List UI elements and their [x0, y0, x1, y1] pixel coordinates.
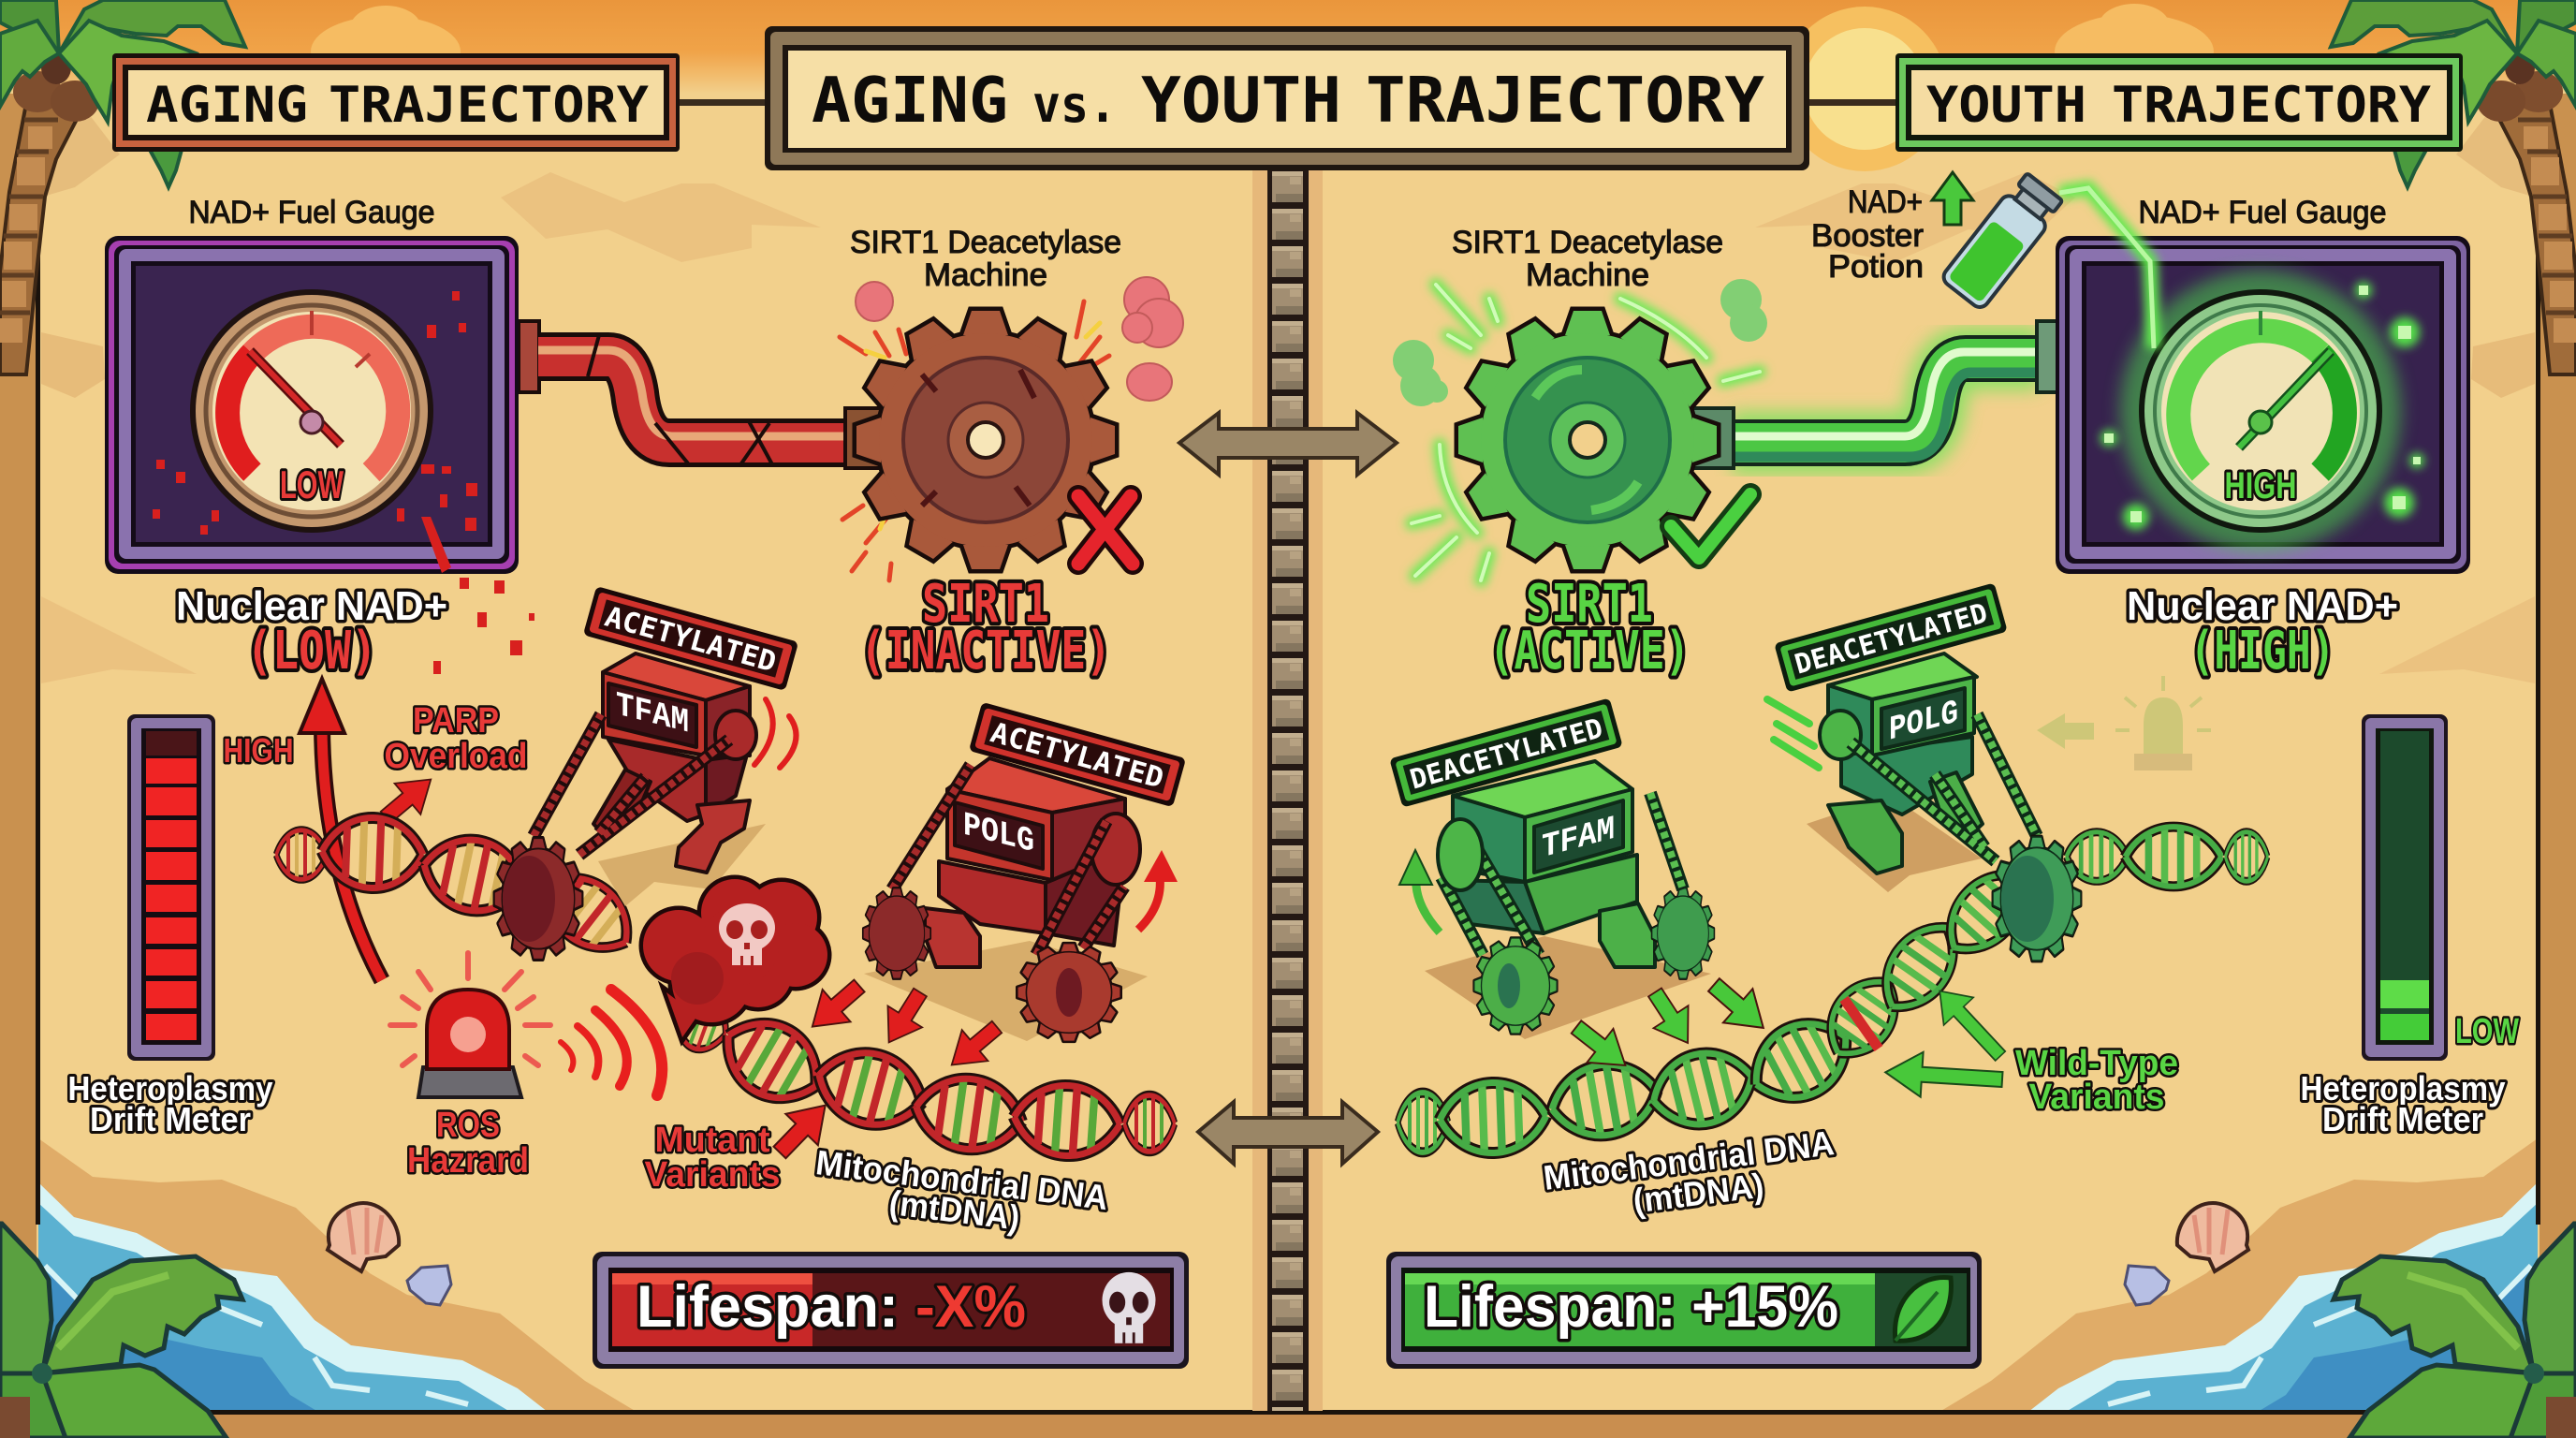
robot: POLG acetylated — [863, 758, 1148, 1041]
gauge panel: high NAD+ — [2056, 236, 2470, 574]
label: SIRT1 deacetylase machine: SIRT1 Deacetylase — [850, 225, 1121, 260]
shoreline left — [38, 1138, 637, 1412]
gear: SIRT1 inactive — [845, 311, 1115, 569]
panel: aging side — [67, 195, 1189, 1369]
palm bottom right — [2334, 1224, 2576, 1438]
dunes left — [41, 108, 821, 683]
arrow: ROS to NAD+ depletion — [300, 679, 382, 980]
gauge dial: low: LOW — [280, 462, 344, 506]
banner: aging trajectory — [112, 53, 680, 152]
label: NAD+ booster potion: NAD+ — [1848, 184, 1923, 220]
label: SIRT1 deacetylase machine — [1452, 225, 1723, 293]
potion stream — [2059, 188, 2154, 348]
sparks — [840, 301, 1109, 580]
lifespan bar: aging: Lifespan: — [637, 1274, 899, 1340]
arrow: PARP — [373, 764, 444, 833]
label: heteroplasmy drift meter — [2301, 1069, 2505, 1138]
title banner: YOUTH — [1141, 64, 1341, 137]
label: mitochondrial DNA: (mtDNA) — [1631, 1167, 1765, 1220]
title banner: vs. — [1032, 75, 1117, 134]
label: NAD+ fuel gauge: NAD+ Fuel Gauge — [189, 195, 434, 230]
tag: acetylated POLG: ACETYLATED — [987, 716, 1167, 796]
label: heteroplasmy drift meter: Heteroplasmy — [67, 1069, 273, 1108]
label: Nuclear NAD+ low: (LOW) — [246, 621, 377, 682]
label: SIRT1 active: SIRT1 — [1526, 574, 1653, 635]
label: heteroplasmy drift meter — [67, 1069, 273, 1138]
connector lines — [680, 99, 1895, 106]
label: wild-type variants: Variants — [2029, 1078, 2164, 1117]
gauge panel: low NAD+ — [105, 236, 519, 574]
label: wild-type variants: Wild-Type — [2015, 1044, 2178, 1083]
label: ROS hazard: ROS — [436, 1106, 500, 1145]
arrow: NAD+ up — [1932, 172, 1973, 225]
label: SIRT1 deacetylase machine: Machine — [1526, 257, 1649, 293]
banner: youth trajectory: TRAJECTORY — [2112, 77, 2431, 134]
meter: heteroplasmy low — [2362, 714, 2448, 1061]
banner: aging trajectory: TRAJECTORY — [329, 77, 649, 134]
DNA wild-type strand — [1398, 827, 2268, 1154]
DNA mitochondrial mutant strand — [670, 993, 1175, 1159]
title banner — [765, 26, 1809, 170]
tag: acetylated POLG — [969, 702, 1186, 807]
mutant band — [1844, 999, 1879, 1049]
lifespan bar: youth: Lifespan: +15% — [1424, 1274, 1838, 1340]
label: mutant variants: Variants — [644, 1155, 781, 1195]
tag: deacetylated POLG — [1774, 582, 2008, 693]
label: PARP overload: PARP — [413, 701, 499, 741]
tag: acetylated TFAM — [583, 586, 798, 691]
gauge dial: low — [190, 289, 433, 533]
label: Nuclear NAD+ high: (HIGH) — [2190, 621, 2334, 682]
label: SIRT1 deacetylase machine — [850, 225, 1121, 293]
banner: aging trajectory: AGING — [146, 77, 308, 134]
DNA upper strand — [276, 816, 644, 966]
icon: green check — [1671, 494, 1750, 558]
robot: TFAM deacetylated — [1425, 761, 1714, 1039]
label: SIRT1 inactive: (INACTIVE) — [860, 621, 1111, 682]
label: HIGH: HIGH — [223, 731, 294, 770]
shells left — [328, 1203, 451, 1305]
title banner: TRAJECTORY — [1366, 64, 1765, 137]
robot: TFAM acetylated — [494, 653, 766, 960]
label: SIRT1 deacetylase machine: Machine — [924, 257, 1047, 293]
icon: red X — [1078, 496, 1133, 564]
label: NAD+ booster potion — [1811, 184, 1924, 285]
robot: TFAM deacetylated: TFAM — [1542, 810, 1615, 868]
pipe: cracked red — [519, 321, 847, 466]
gauge dial: high: HIGH — [2224, 465, 2297, 506]
label: NAD+ fuel gauge: NAD+ Fuel Gauge — [2138, 195, 2387, 230]
smoke puffs — [856, 277, 1183, 401]
motion lines POLG — [1767, 699, 1819, 768]
tag: deacetylated POLG: DEACETYLATED — [1792, 596, 1991, 681]
energy streaks — [1412, 285, 1760, 580]
label: heteroplasmy drift meter: Drift Meter — [2322, 1100, 2483, 1138]
arrows: wild-type variants — [1884, 977, 2015, 1102]
robot: POLG deacetylated — [1807, 653, 2081, 961]
arrow: lower double-headed — [1198, 1102, 1378, 1164]
label: mitochondrial DNA: Mitochondrial DNA — [1542, 1123, 1836, 1197]
green sparkles — [2100, 282, 2424, 530]
label: heteroplasmy drift meter: Drift Meter — [90, 1100, 251, 1138]
gauge dial: high — [2139, 289, 2382, 533]
banner: youth trajectory: YOUTH — [1926, 77, 2086, 134]
sky band — [0, 0, 2576, 94]
pipe: glowing green — [1732, 321, 2057, 457]
label: SIRT1 inactive: SIRT1 — [922, 574, 1049, 635]
robot: TFAM acetylated: TFAM — [616, 686, 689, 742]
label: mutant variants: Mutant — [655, 1121, 770, 1160]
icon: NAD+ booster potion — [1940, 170, 2066, 311]
tag: acetylated TFAM: ACETYLATED — [601, 600, 780, 679]
siren: ROS hazard — [390, 953, 550, 1097]
label: ROS hazard — [407, 1106, 529, 1181]
motion lines TFAM — [754, 699, 797, 768]
icon: leaf — [1895, 1277, 1951, 1341]
clouds — [311, 4, 2214, 89]
dunes right — [1755, 108, 2535, 683]
arrow: upper double-headed — [1179, 413, 1397, 475]
sun — [1782, 7, 1947, 171]
label: mitochondrial DNA — [1542, 1123, 1840, 1231]
palm bottom left — [0, 1224, 242, 1438]
icon: skull — [1103, 1272, 1155, 1343]
label: mutant variants — [644, 1121, 781, 1195]
hazard waves — [561, 990, 662, 1095]
label: SIRT1 active: (ACTIVE) — [1488, 621, 1690, 682]
NAD+ leak splatter — [153, 291, 534, 674]
arrows: TFAM repair — [1563, 968, 1778, 1082]
ROS cloud with skull — [643, 879, 827, 1037]
label: mitochondrial DNA: (mtDNA) — [887, 1183, 1022, 1238]
label: PARP overload — [384, 701, 528, 776]
tag: deacetylated TFAM — [1389, 697, 1623, 808]
tag: deacetylated TFAM: DEACETYLATED — [1407, 712, 1606, 796]
label: PARP overload: Overload — [384, 737, 528, 776]
title banner: AGING — [812, 64, 1008, 137]
gear: SIRT1 active — [1458, 311, 1734, 569]
palm top right — [2331, 0, 2576, 374]
shoreline right — [1939, 1138, 2538, 1412]
palm top left — [0, 0, 245, 374]
arrow: mutant variants — [764, 1090, 842, 1168]
robot: POLG acetylated: POLG — [963, 806, 1034, 861]
central stone wall — [1252, 169, 1323, 1411]
label: SIRT1 inactive — [860, 574, 1111, 682]
robot: POLG deacetylated: POLG — [1889, 694, 1958, 751]
label: mitochondrial DNA — [810, 1143, 1110, 1248]
label: mitochondrial DNA: Mitochondrial DNA — [813, 1143, 1110, 1217]
lifespan bar: youth — [1386, 1252, 1982, 1369]
label: SIRT1 active — [1488, 574, 1690, 682]
faded siren and arrow — [2037, 676, 2211, 770]
lifespan bar: aging — [593, 1252, 1189, 1369]
lifespan bar: aging: -X% — [915, 1274, 1026, 1340]
label: wild-type variants — [2015, 1044, 2178, 1117]
arrows: POLG mutations — [798, 970, 1010, 1080]
label: LOW: LOW — [2455, 1012, 2519, 1051]
meter: heteroplasmy high — [127, 714, 215, 1061]
label: heteroplasmy drift meter: Heteroplasmy — [2301, 1069, 2505, 1108]
label: Nuclear NAD+ low — [176, 583, 447, 682]
label: NAD+ booster potion: Booster — [1811, 218, 1924, 254]
label: Nuclear NAD+ low: Nuclear NAD+ — [176, 583, 447, 629]
label: Nuclear NAD+ high — [2127, 583, 2398, 682]
arrow: POLG rotation — [1138, 850, 1178, 930]
shells right — [2125, 1203, 2248, 1305]
label: ROS hazard: Hazrard — [407, 1141, 529, 1181]
label: Nuclear NAD+ high: Nuclear NAD+ — [2127, 583, 2398, 629]
label: NAD+ booster potion: Potion — [1828, 249, 1924, 285]
panel: youth side — [1386, 170, 2519, 1369]
arrow: TFAM rotation — [1399, 850, 1440, 932]
banner: youth trajectory — [1895, 53, 2463, 152]
label: SIRT1 deacetylase machine: SIRT1 Deacetylase — [1452, 225, 1723, 260]
smoke puffs green — [1393, 279, 1767, 406]
